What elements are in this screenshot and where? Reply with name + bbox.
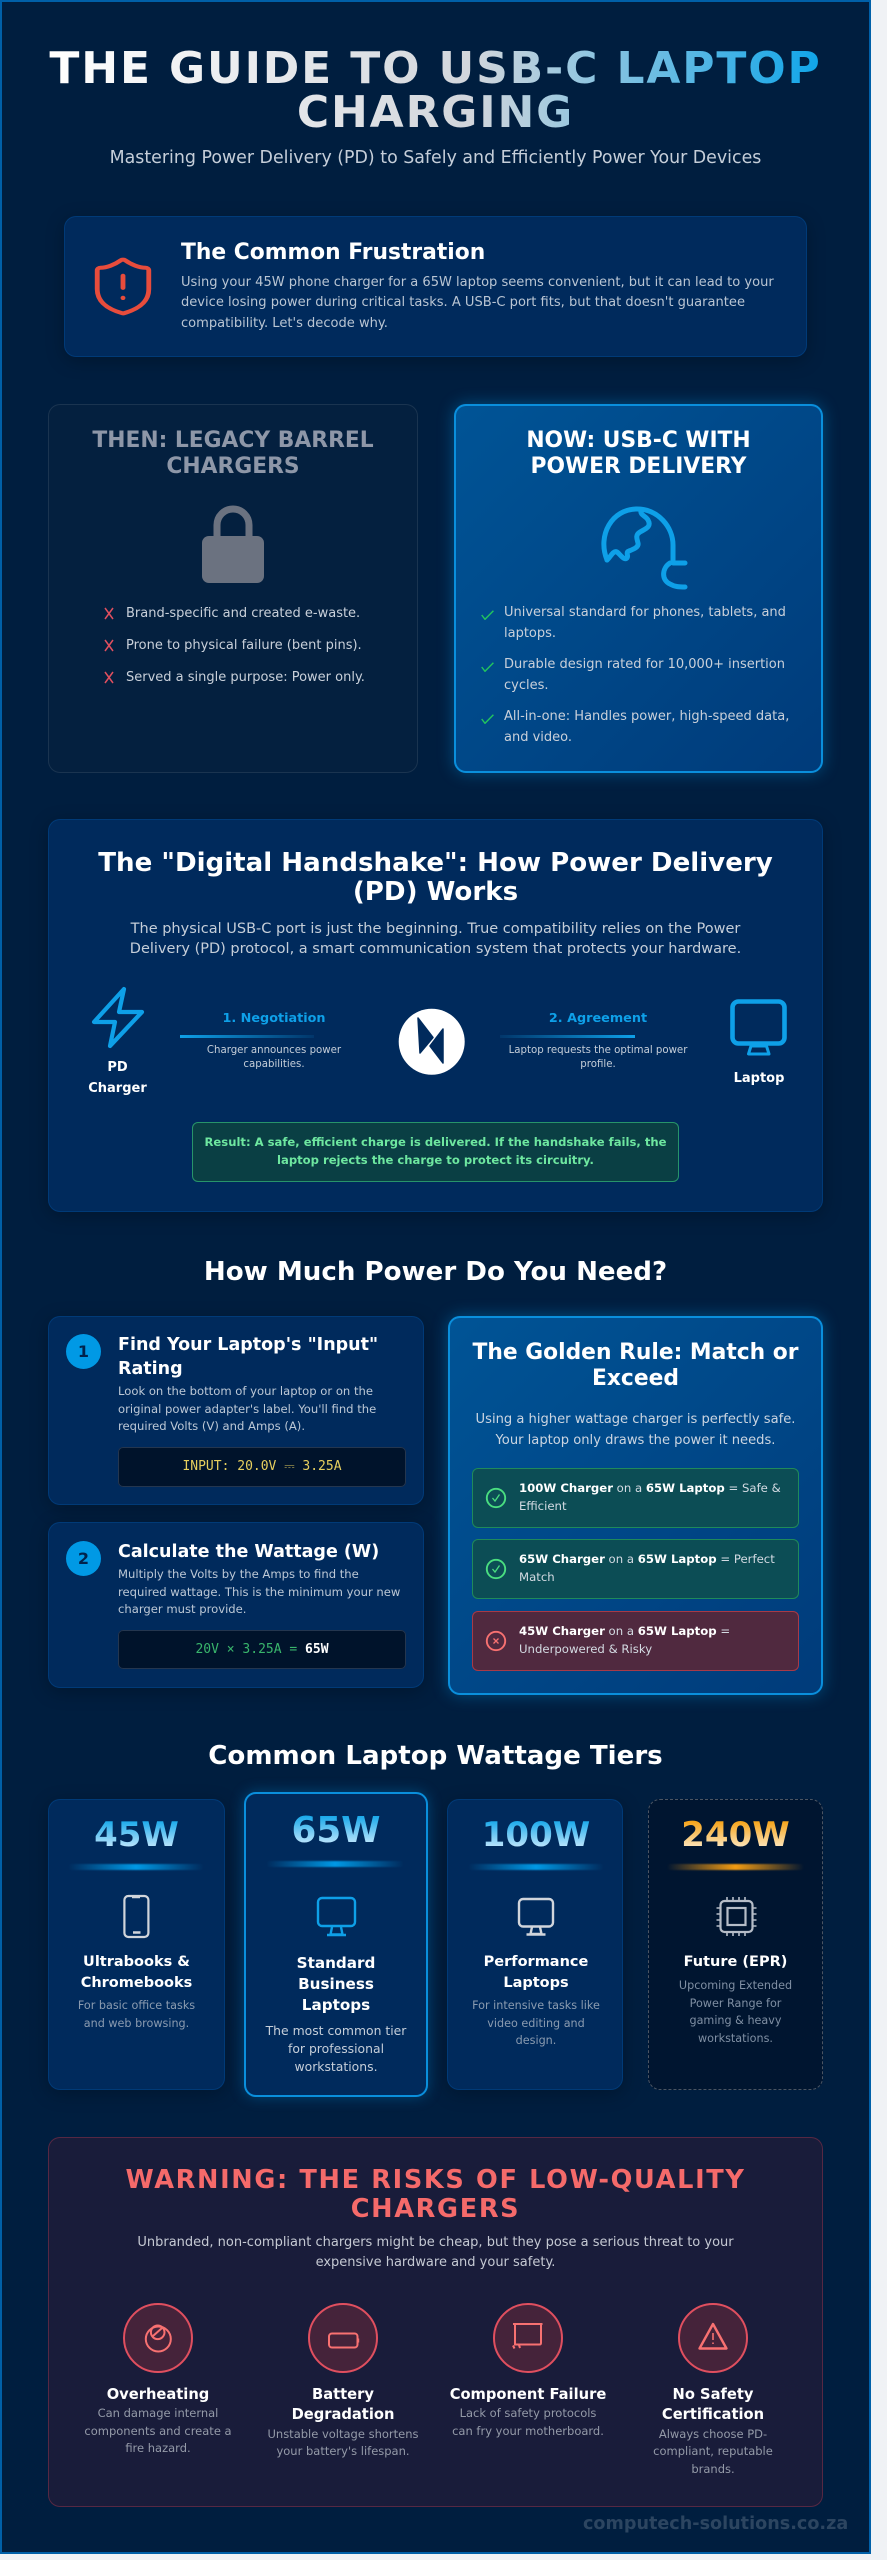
subtitle: Mastering Power Delivery (PD) to Safely and Efficiently Power Your Devices <box>110 148 761 168</box>
tier text: For basic office tasks <box>78 1999 195 2012</box>
risk: battery degradation <box>258 2303 428 2478</box>
icon: phone <box>123 1894 150 1938</box>
match: 65W perfect <box>472 1539 799 1599</box>
step: negotiation <box>180 1011 342 1070</box>
panel: step 2 <box>48 1522 424 1688</box>
now heading <box>526 428 751 479</box>
icon: cross circle <box>486 1630 506 1652</box>
warning text: expensive hardware and your safety. <box>316 2255 555 2270</box>
handshake flow diagram <box>88 986 787 1096</box>
then heading <box>92 428 374 479</box>
wattage value <box>447 1815 625 1855</box>
tier text: for professional <box>288 2041 384 2056</box>
node: pd charger <box>88 986 147 1096</box>
golden heading <box>472 1340 799 1391</box>
list item: All-in-one: Handles power, high-speed data, <box>504 709 789 724</box>
step number: 2 <box>78 1548 89 1568</box>
step text: original power adapter's label. You'll find the <box>118 1402 376 1416</box>
frustration text: device losing power during critical tasks. A USB-C port fits, but that doesn't guarantee <box>181 295 745 310</box>
tier text: Power Range for <box>690 1996 781 2010</box>
step title: 2. Agreement <box>549 1011 647 1026</box>
tier text: workstations. <box>294 2059 378 2074</box>
now list <box>481 605 789 744</box>
result text <box>204 1135 666 1167</box>
risk text: Battery <box>312 2386 374 2403</box>
icon: monitor <box>515 1895 557 1938</box>
list item <box>481 605 786 640</box>
panel: step 1 <box>48 1316 424 1505</box>
risk text: Lack of safety protocols <box>460 2406 596 2420</box>
list item: laptops. <box>504 626 556 640</box>
frustration heading: The Common Frustration <box>181 240 485 265</box>
step text: Laptop requests the optimal power <box>509 1045 687 1056</box>
risk text: Component Failure <box>450 2386 606 2403</box>
risk text <box>73 2385 243 2458</box>
then list <box>104 606 365 684</box>
risk: component failure <box>443 2303 613 2478</box>
title: THE GUIDE TO USB-C LAPTOP <box>49 43 822 94</box>
risk text: Certification <box>662 2406 764 2423</box>
step title: Calculate the Wattage (W) <box>118 1542 379 1562</box>
glow divider <box>68 1864 204 1870</box>
step text: Look on the bottom of your laptop or on the <box>118 1384 373 1398</box>
glow divider <box>468 1864 604 1870</box>
match text: Efficient <box>519 1499 567 1513</box>
tier label <box>447 1952 625 1993</box>
match text <box>519 1481 781 1513</box>
icon: handshake circle <box>398 1008 465 1075</box>
frustration text: compatibility. Let's decode why. <box>181 316 388 331</box>
golden text <box>476 1412 795 1448</box>
match: 100W safe <box>472 1468 799 1528</box>
match text: 100W Charger on a 65W Laptop = Safe & <box>519 1481 781 1495</box>
icon: lightning bolt <box>92 986 144 1048</box>
step title: Rating <box>118 1359 183 1379</box>
icon: component <box>493 2303 563 2373</box>
tier label: Business <box>298 1975 374 1993</box>
tier label: Laptops <box>302 1996 370 2014</box>
icon: overheating <box>123 2303 193 2373</box>
match: 45W risky <box>472 1611 799 1671</box>
tier label: Performance <box>484 1954 588 1970</box>
panel: digital handshake <box>48 819 823 1212</box>
list item: Prone to physical failure (bent pins). <box>126 638 362 652</box>
icon: monitor <box>314 1894 359 1939</box>
heading: wattage tiers: Common Laptop Wattage Tiers <box>208 1741 663 1771</box>
match text: 65W Charger on a 65W Laptop = Perfect <box>519 1552 775 1566</box>
wattage value: 240W <box>681 1815 790 1855</box>
golden text: Your laptop only draws the power it needs. <box>496 1432 775 1448</box>
step text <box>207 1045 342 1070</box>
icon: warning triangle <box>678 2303 748 2373</box>
tier text <box>447 1997 625 2050</box>
now heading: NOW: USB-C WITH <box>526 428 751 453</box>
warning heading: CHARGERS <box>351 2194 520 2224</box>
then heading: CHARGERS <box>166 454 300 479</box>
step text: Charger announces power <box>207 1045 341 1056</box>
warning text: Unbranded, non-compliant chargers might be cheap, but they pose a serious threat to your <box>137 2235 734 2250</box>
tier text: gaming & heavy <box>689 2014 782 2027</box>
match text <box>519 1552 775 1584</box>
handshake text: The physical USB-C port is just the beginning. True compatibility relies on the Power <box>131 921 740 937</box>
risk text <box>443 2385 613 2440</box>
golden heading: The Golden Rule: Match or <box>472 1340 799 1365</box>
golden text: Using a higher wattage charger is perfectly safe. <box>476 1412 795 1427</box>
risk text: compliant, reputable <box>653 2444 773 2458</box>
code: input rating: INPUT: 20.0V ⎓ 3.25A <box>182 1459 342 1474</box>
tier label: Future (EPR) <box>684 1954 787 1970</box>
handshake text <box>130 921 741 957</box>
list item <box>481 657 785 692</box>
risk text: fire hazard. <box>125 2441 191 2455</box>
tier text <box>48 1997 225 2032</box>
handshake heading: (PD) Works <box>353 876 518 906</box>
panel: now usb-c with power delivery <box>454 404 823 773</box>
icon: laptop monitor <box>730 999 787 1056</box>
tier text: video editing and <box>487 2016 585 2030</box>
tier card: 240W future <box>648 1799 823 2090</box>
list item <box>481 709 789 744</box>
title: CHARGING <box>297 86 574 138</box>
tier text: and web browsing. <box>84 2016 189 2030</box>
handshake text: Delivery (PD) protocol, a smart communication system that protects your hardware. <box>130 941 741 957</box>
risk text: brands. <box>691 2462 735 2476</box>
panel: golden rule <box>448 1316 823 1695</box>
risk text: No Safety <box>673 2386 753 2403</box>
risk text: Always choose PD- <box>659 2427 767 2441</box>
icon: chip <box>715 1895 757 1938</box>
risk text: Overheating <box>107 2386 209 2403</box>
risk text <box>258 2385 428 2461</box>
code: wattage formula: 20V × 3.25A = 65W <box>195 1642 329 1657</box>
panel: then legacy barrel chargers <box>48 404 418 773</box>
step text: charger must provide. <box>118 1602 246 1616</box>
icon: check circle <box>486 1488 506 1508</box>
tier label <box>48 1952 225 1993</box>
charger label: Charger <box>88 1080 147 1096</box>
glow divider <box>266 1861 404 1867</box>
arrow line <box>180 1034 314 1038</box>
risk: overheating <box>73 2303 243 2478</box>
heading: how much power: How Much Power Do You Need? <box>204 1257 667 1287</box>
match text: Match <box>519 1570 555 1584</box>
step title <box>118 1335 378 1379</box>
step text <box>509 1045 688 1070</box>
list item: and video. <box>504 730 572 744</box>
icon: padlock <box>202 506 264 583</box>
charger label <box>88 1060 147 1096</box>
step text <box>118 1384 376 1433</box>
icon: battery <box>308 2303 378 2373</box>
result text: laptop rejects the charge to protect its circuitry. <box>277 1153 594 1167</box>
icon: usb-c plug globe <box>601 506 688 590</box>
node: laptop <box>730 999 787 1086</box>
golden heading: Exceed <box>592 1366 679 1391</box>
tier label: Chromebooks <box>81 1974 192 1990</box>
step title: 1. Negotiation <box>222 1011 326 1026</box>
code: input rating <box>118 1447 406 1487</box>
tier text: design. <box>516 2034 556 2047</box>
frustration text <box>181 275 774 331</box>
panel: the common frustration <box>64 216 807 357</box>
list item: Durable design rated for 10,000+ insertion <box>504 657 785 672</box>
tier text: The most common tier <box>266 2023 406 2038</box>
step text: Multiply the Volts by the Amps to find the <box>118 1567 359 1581</box>
footer watermark: computech-solutions.co.za <box>583 2514 848 2534</box>
risk text: Degradation <box>292 2406 394 2423</box>
tier text: workstations. <box>698 2032 773 2044</box>
wattage value: 100W <box>482 1815 590 1855</box>
risk text: your battery's lifespan. <box>276 2444 410 2458</box>
step text: capabilities. <box>243 1059 305 1070</box>
icon: warning shield <box>94 258 152 316</box>
step text <box>118 1567 400 1616</box>
wattage value <box>648 1815 823 1855</box>
step: agreement <box>500 1011 688 1070</box>
tier label: Ultrabooks & <box>83 1954 190 1970</box>
then heading: THEN: LEGACY BARREL <box>92 428 374 453</box>
tier label: Laptops <box>503 1974 569 1990</box>
step text: required Volts (V) and Amps (A). <box>118 1419 305 1433</box>
wattage value <box>244 1810 428 1852</box>
step text: profile. <box>580 1059 616 1070</box>
step title: Find Your Laptop's "Input" <box>118 1335 378 1355</box>
match text: 45W Charger on a 65W Laptop = <box>519 1624 730 1638</box>
result callout <box>192 1122 679 1182</box>
tier card: 100W <box>447 1799 623 2090</box>
list item: Served a single purpose: Power only. <box>126 670 365 684</box>
step text: required wattage. This is the minimum your new <box>118 1584 400 1598</box>
list item: Universal standard for phones, tablets, and <box>504 605 786 620</box>
tier card: 65W highlighted <box>244 1792 428 2097</box>
risk text: can fry your motherboard. <box>452 2424 604 2438</box>
handshake heading <box>98 848 773 906</box>
frustration text: Using your 45W phone charger for a 65W laptop seems convenient, but it can lead to your <box>181 275 774 290</box>
charger label: PD <box>107 1060 128 1075</box>
warning heading <box>48 2166 823 2224</box>
tier label: Standard <box>297 1954 375 1972</box>
tier text: Upcoming Extended <box>679 1979 792 1992</box>
wattage value: 45W <box>94 1815 179 1855</box>
glow divider <box>667 1864 804 1870</box>
list item: Brand-specific and created e-waste. <box>126 606 360 620</box>
risk: no safety certification <box>628 2303 798 2478</box>
icon: check circle <box>486 1558 506 1580</box>
match text: Underpowered & Risky <box>519 1642 652 1656</box>
match text <box>519 1624 730 1656</box>
step number <box>66 1334 101 1368</box>
warning heading: WARNING: THE RISKS OF LOW-QUALITY <box>125 2164 746 2194</box>
arrow line <box>500 1034 635 1038</box>
code: wattage formula <box>118 1630 406 1669</box>
risk text: Unstable voltage shortens <box>267 2427 418 2441</box>
tier card: 45W <box>48 1799 225 2090</box>
risk text: Can damage internal <box>98 2406 218 2420</box>
tier text: For intensive tasks like <box>472 1999 600 2012</box>
now heading: POWER DELIVERY <box>531 454 746 479</box>
risk text <box>628 2385 798 2478</box>
risk text: components and create a <box>84 2424 232 2438</box>
panel: warning <box>48 2137 823 2507</box>
step number <box>66 1540 101 1576</box>
title <box>48 47 823 134</box>
handshake heading: The "Digital Handshake": How Power Delivery <box>98 848 773 878</box>
step number: 1 <box>78 1342 89 1360</box>
list item: cycles. <box>504 678 549 692</box>
wattage value: 65W <box>291 1810 381 1851</box>
tier text <box>648 1977 823 2047</box>
laptop label: Laptop <box>734 1071 784 1086</box>
result text: Result: A safe, efficient charge is delivered. If the handshake fails, the <box>204 1135 666 1149</box>
warning text <box>48 2233 823 2274</box>
tier label <box>244 1952 428 2016</box>
wattage value <box>48 1815 225 1855</box>
tier text <box>244 2022 428 2076</box>
